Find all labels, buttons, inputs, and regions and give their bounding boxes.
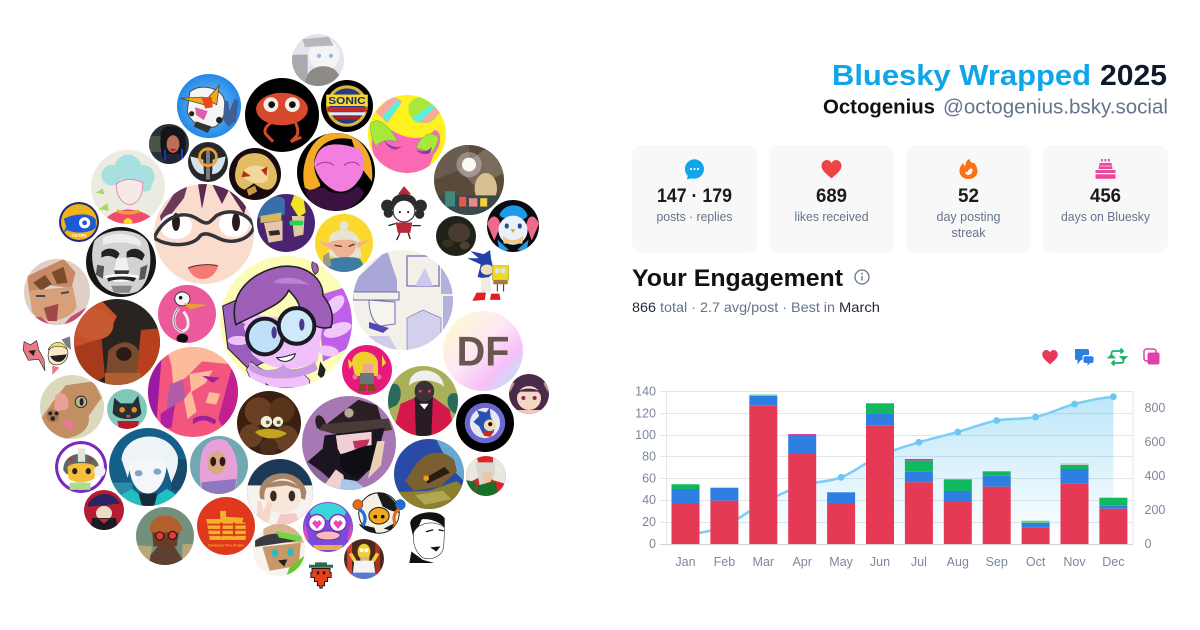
left axis labels: 20 bbox=[642, 515, 656, 529]
bar: May bbox=[827, 492, 855, 544]
stat card: day posting streak: day posting bbox=[936, 209, 1000, 224]
stat card: days on Bluesky: 456 bbox=[1090, 186, 1121, 207]
avatar: photo of toys bbox=[434, 145, 504, 215]
month labels bbox=[675, 555, 1125, 569]
avatar: DF donut letters bbox=[443, 311, 523, 391]
avatar: DF donut letters: DF bbox=[457, 327, 509, 374]
stat card: likes received: 689 bbox=[816, 186, 847, 207]
left axis labels: 0 bbox=[649, 537, 656, 551]
avatar: halo helmet bbox=[394, 439, 464, 509]
left axis labels: 60 bbox=[642, 472, 656, 486]
left axis labels: 100 bbox=[635, 428, 656, 442]
avatar: red and green grey-haired bbox=[466, 456, 506, 496]
legend: likes heart bbox=[1042, 350, 1058, 364]
avatar: pink cat and laughing boy bbox=[23, 336, 71, 375]
avatar: red coat with white hair bbox=[388, 366, 458, 436]
left axis labels: 140 bbox=[635, 384, 656, 398]
left axis labels: 40 bbox=[642, 493, 656, 507]
avatar: sonic 25 years badge: 25 bbox=[74, 204, 84, 214]
stat card: posts and replies: 147 · 179 bbox=[657, 186, 732, 207]
month labels: Jul bbox=[911, 555, 927, 569]
avatar: red logo: Consumer Fine Arcade bbox=[208, 542, 245, 547]
avatar: black cat on teal bbox=[107, 389, 147, 429]
avatar: blond red-eyed character bbox=[229, 148, 281, 200]
legend: quotes squares bbox=[1144, 349, 1160, 364]
stat card: posts and replies bbox=[632, 145, 757, 253]
avatar: posterized pink old man bbox=[148, 347, 238, 437]
stacked bars bbox=[672, 394, 1127, 544]
avatar: cap green hat bbox=[253, 524, 305, 576]
avatar: glasses girl bbox=[154, 184, 254, 284]
icon: birthday cake bbox=[1096, 159, 1116, 179]
avatar: sonic 25 years badge: YEARS bbox=[71, 233, 87, 238]
avatar: white-haired teal anime bbox=[109, 428, 187, 506]
month labels: Apr bbox=[792, 555, 812, 569]
user name and handle: Octogenius bbox=[823, 96, 935, 118]
bar: Feb bbox=[710, 488, 738, 544]
avatar: brown fist face bbox=[24, 259, 90, 325]
avatar: teal-haired sketch boy bbox=[91, 150, 165, 227]
avatar: black and white girl with bow bbox=[381, 186, 427, 240]
avatar: beavis character bbox=[257, 194, 315, 252]
bar: Sep bbox=[983, 471, 1011, 544]
avatar: sonic coin bbox=[456, 394, 514, 452]
avatar: dark small photo bbox=[436, 216, 476, 256]
avatar: masked hat character bbox=[302, 396, 396, 490]
legend: reposts arrows bbox=[1109, 348, 1126, 366]
stat card: days on Bluesky bbox=[1043, 145, 1168, 253]
avatar: astronaut chibi with purple ring bbox=[55, 441, 107, 493]
title: Bluesky Wrapped bbox=[832, 60, 1091, 92]
avatar: sonic mania logo bbox=[321, 80, 373, 132]
right axis labels: 800 bbox=[1144, 401, 1165, 415]
avatar: main purple character with goggles bbox=[220, 256, 353, 388]
cumulative area and line bbox=[686, 393, 1117, 544]
month labels: Jan bbox=[675, 555, 696, 569]
right axis labels: 600 bbox=[1144, 435, 1165, 449]
engagement summary text: March bbox=[839, 299, 880, 315]
engagement summary text bbox=[632, 299, 880, 315]
engagement summary text: 866 bbox=[632, 299, 656, 315]
left axis labels: 80 bbox=[642, 450, 656, 464]
avatar: red witch hat bbox=[84, 490, 124, 530]
bar: Apr bbox=[788, 434, 816, 544]
bar: Aug bbox=[944, 479, 972, 544]
avatar: red blob on black bbox=[245, 78, 319, 152]
bar: Nov bbox=[1060, 463, 1088, 544]
icon: chat bubble bbox=[685, 159, 704, 179]
avatar: fuzzy pink bunny with red bg bbox=[342, 345, 392, 395]
avatar: woman photo bbox=[149, 124, 189, 164]
month labels: Dec bbox=[1102, 555, 1125, 569]
right axis labels: 400 bbox=[1144, 469, 1165, 483]
engagement summary text: total · 2.7 avg/post · Best in bbox=[660, 299, 835, 315]
month labels: Oct bbox=[1026, 555, 1046, 569]
bar: Jan bbox=[672, 484, 700, 544]
month labels: Aug bbox=[947, 555, 969, 569]
panel: stat cards bbox=[632, 145, 1168, 253]
panel: header bbox=[823, 60, 1168, 118]
month labels: Nov bbox=[1063, 555, 1086, 569]
avatar: orange-haired goggles guy bbox=[136, 507, 194, 565]
bar: Oct bbox=[1022, 521, 1050, 544]
avatar: sonic mania logo: SONIC bbox=[328, 96, 366, 107]
stat card: likes received bbox=[769, 145, 894, 253]
avatar: brown-haired anime girl bbox=[509, 374, 549, 414]
avatar: brown afro duck bbox=[237, 391, 301, 456]
month labels: May bbox=[829, 555, 854, 569]
title: 2025 bbox=[1100, 60, 1167, 92]
avatar: gundam mascot on blue bbox=[177, 74, 241, 138]
avatar: blue penguin bbox=[487, 200, 539, 252]
avatar: pink with white duck bbox=[158, 285, 216, 343]
icon: heart bbox=[822, 160, 842, 178]
right axis labels: 200 bbox=[1144, 503, 1165, 517]
right axis labels bbox=[1144, 401, 1165, 551]
month labels: Sep bbox=[986, 555, 1008, 569]
avatar: pixel carrot bbox=[309, 562, 333, 588]
bar: Jul bbox=[905, 459, 933, 544]
avatar: red logo bbox=[197, 497, 255, 555]
icon: info bbox=[855, 270, 869, 284]
avatar: sonic and spongebob bbox=[467, 250, 509, 301]
chart legend icons bbox=[1042, 348, 1160, 366]
month labels: Mar bbox=[753, 555, 774, 569]
avatar: heart eyes pastel bbox=[303, 502, 353, 552]
month labels: Feb bbox=[714, 555, 735, 569]
avatar: orange gear sword emblem bbox=[188, 142, 228, 182]
avatar: yellow and pink face bbox=[368, 95, 446, 173]
avatar: black and white man bbox=[409, 512, 445, 563]
avatar: anime girl peace sign bbox=[247, 459, 313, 525]
avatar: homer simpson bbox=[344, 539, 384, 579]
avatar: elf on yellow bbox=[315, 214, 373, 272]
bar: Dec bbox=[1099, 498, 1127, 544]
user name and handle bbox=[823, 96, 1168, 118]
heading: Your Engagement: Your Engagement bbox=[632, 265, 843, 292]
avatar: pink hood on teal bbox=[190, 436, 248, 494]
avatar: grey sketch girl bbox=[292, 34, 344, 86]
stat card: day posting streak: 52 bbox=[958, 186, 979, 207]
avatar: pink face with blond hair bbox=[297, 133, 375, 211]
avatar: sonic 25 years badge bbox=[59, 202, 99, 242]
avatar: manga santa hat bbox=[353, 250, 455, 350]
stat card: posts and replies: posts · replies bbox=[656, 209, 733, 224]
avatar: red blurry face bbox=[74, 299, 160, 385]
left axis labels: 120 bbox=[635, 406, 656, 420]
avatar: brown puppy bbox=[40, 375, 104, 439]
stat card: day posting streak: streak bbox=[952, 225, 986, 240]
avatar: cow mascot bbox=[353, 493, 405, 533]
right axis labels: 0 bbox=[1144, 537, 1152, 551]
stat card: likes received: likes received bbox=[794, 209, 868, 224]
bar: Mar bbox=[749, 394, 777, 544]
month labels: Jun bbox=[870, 555, 890, 569]
icon: flame bbox=[960, 159, 978, 179]
user name and handle: @octogenius.bsky.social bbox=[943, 96, 1168, 118]
avatar: statue engraving face bbox=[86, 227, 156, 297]
avatar cloud bbox=[23, 34, 549, 588]
bar: Jun bbox=[866, 403, 894, 544]
left axis labels bbox=[635, 384, 656, 551]
stat card: day posting streak bbox=[906, 145, 1031, 253]
legend: replies bubbles bbox=[1075, 349, 1094, 366]
combo chart: monthly engagement bars and cumulative line bbox=[635, 384, 1165, 569]
stat card: days on Bluesky: days on Bluesky bbox=[1061, 209, 1150, 224]
